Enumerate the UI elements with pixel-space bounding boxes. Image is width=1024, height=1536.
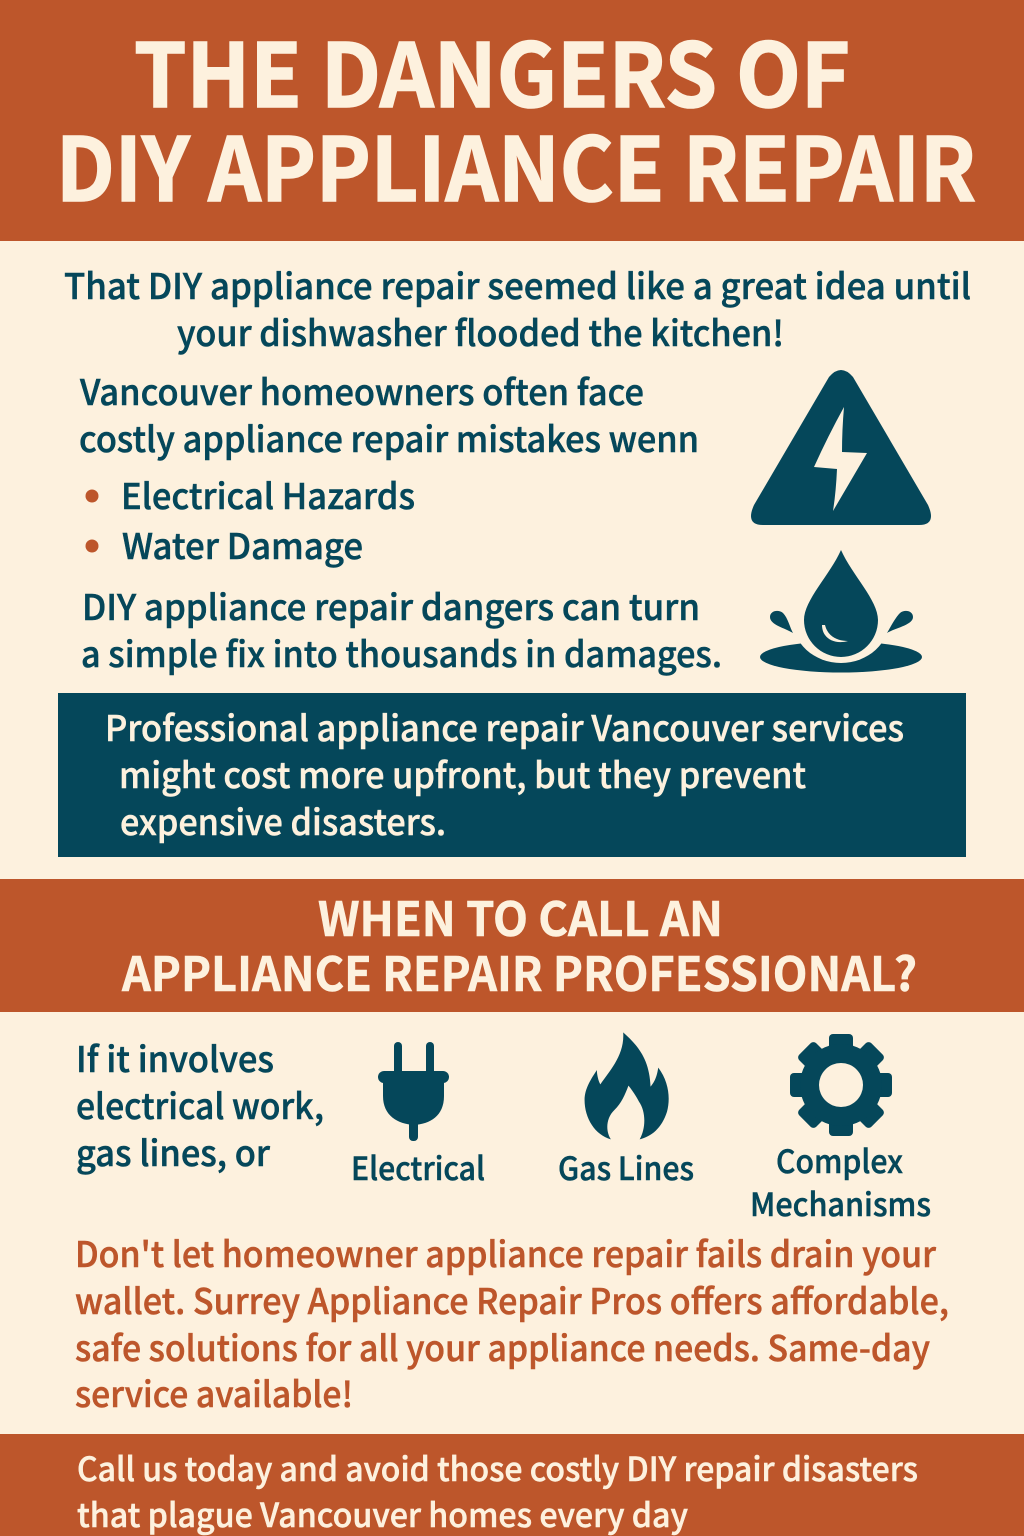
section heading: when to call	[0, 879, 1024, 1012]
intro text: your dishwasher flooded the kitchen!	[177, 306, 784, 357]
text: if it involves: electrical work,	[76, 1079, 324, 1130]
callout: professional repair: Professional appliance repair Vancouver services	[105, 701, 904, 752]
callout: professional repair: expensive disasters.	[120, 795, 446, 846]
section heading: when to call: APPLIANCE REPAIR PROFESSIONAL?	[121, 936, 917, 1005]
icon: gas flame	[585, 1032, 669, 1139]
orange call to action paragraph	[75, 1227, 949, 1418]
text: Vancouver homeowners	[79, 365, 699, 463]
title banner	[0, 0, 1024, 241]
title	[56, 6, 976, 227]
orange call to action paragraph: wallet. Surrey Appliance Repair Pros offers affordable,	[75, 1274, 949, 1325]
label: Gas Lines: Gas Lines	[558, 1144, 694, 1190]
icon: gear	[790, 1034, 892, 1136]
text: DIY dangers	[81, 580, 722, 678]
label: Complex Mechanisms: Mechanisms	[750, 1180, 931, 1226]
icon: electrical warning triangle	[751, 370, 931, 525]
title: THE DANGERS OF	[134, 6, 850, 133]
icon: electrical plug	[378, 1042, 449, 1141]
callout: professional repair: might cost more upfront, but they prevent	[119, 748, 806, 799]
bullet list: Water Damage	[122, 519, 363, 570]
text: if it involves: gas lines, or	[76, 1126, 271, 1177]
orange call to action paragraph: service available!	[75, 1367, 353, 1418]
orange call to action paragraph: safe solutions for all your appliance needs. Same-day	[75, 1321, 930, 1372]
footer banner: that plague Vancouver homes every day	[77, 1489, 688, 1536]
title: DIY APPLIANCE REPAIR	[56, 100, 976, 227]
text: Vancouver homeowners: Vancouver homeowners often face	[79, 365, 644, 416]
text: DIY dangers: DIY appliance repair dangers can turn	[82, 580, 700, 631]
bullet list: Electrical Hazards	[121, 469, 415, 520]
footer banner: Call us today and avoid those costly DIY repair disasters	[77, 1443, 918, 1491]
footer banner	[0, 1434, 1024, 1536]
label: Complex Mechanisms	[750, 1137, 931, 1226]
icon: water drop with splash	[760, 550, 922, 672]
intro text	[64, 259, 971, 357]
section heading: when to call: WHEN TO CALL AN	[318, 881, 723, 950]
label: Complex Mechanisms: Complex	[776, 1137, 903, 1183]
intro text: That DIY appliance repair seemed like a great idea until	[64, 259, 971, 310]
text: Vancouver homeowners: costly appliance repair mistakes wenn	[79, 412, 699, 463]
text: if it involves	[76, 1032, 324, 1177]
callout: professional repair	[58, 693, 966, 857]
text: DIY dangers: a simple fix into thousands in damages.	[81, 627, 722, 678]
bullet list	[86, 469, 415, 570]
label: Electrical: Electrical	[351, 1144, 485, 1190]
orange call to action paragraph: Don't let homeowner appliance repair fails drain your	[75, 1227, 937, 1278]
text: if it involves: If it involves	[76, 1032, 274, 1083]
